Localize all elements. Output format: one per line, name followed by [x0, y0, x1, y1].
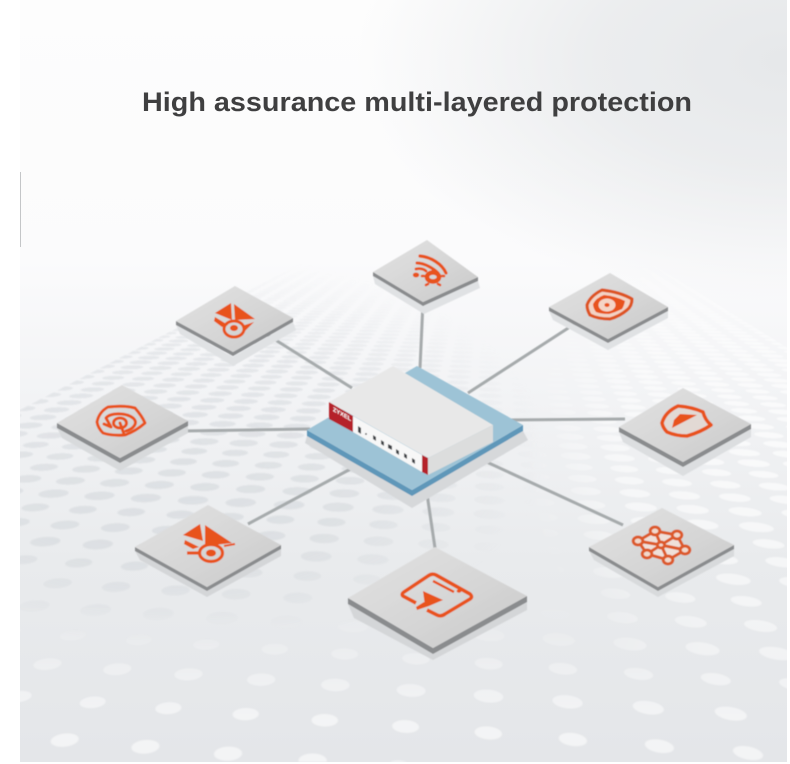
ports	[358, 426, 415, 464]
icon: network nodes	[633, 527, 690, 564]
panel: funnel browser	[348, 547, 527, 660]
title: High assurance multi-layered protection	[142, 87, 692, 117]
panel: mail lens	[135, 505, 281, 597]
device shell	[329, 366, 493, 475]
panel: wifi gear	[373, 240, 480, 314]
icon: wifi gear	[413, 256, 446, 285]
platform shadow	[305, 431, 528, 508]
panel: network cluster	[589, 508, 734, 597]
panel: shield gear	[549, 273, 668, 350]
panel: left shield	[57, 385, 188, 471]
icon: mail with lens	[183, 524, 235, 562]
blue platform	[307, 366, 523, 496]
central firewall device	[305, 366, 528, 508]
icon: shield radar	[97, 406, 145, 435]
device front panel	[329, 402, 428, 475]
left image edge line	[20, 172, 21, 247]
diagram group	[57, 240, 751, 660]
icon: mail with eye	[214, 303, 255, 337]
panel: shield	[619, 388, 751, 476]
icon: shield with gear	[587, 290, 632, 319]
brand label: ZYXEL	[333, 406, 351, 423]
icon: funnel browser	[402, 574, 472, 616]
icon: shield half	[662, 406, 711, 436]
panel: mail eye	[176, 286, 296, 366]
connector lines	[182, 302, 625, 548]
